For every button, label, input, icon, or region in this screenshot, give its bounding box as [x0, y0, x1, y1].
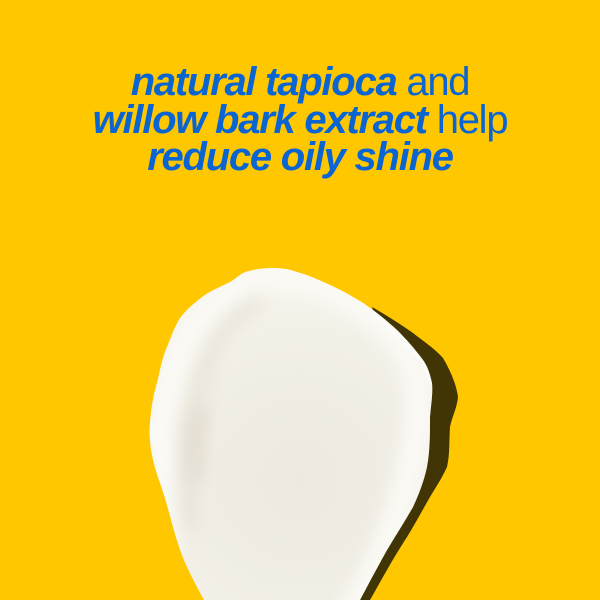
headline [93, 60, 507, 179]
product cream swatch illustration [150, 268, 458, 600]
left dent shading [192, 420, 204, 468]
headline: reduce oily shine [147, 135, 453, 179]
inner shaded crease [187, 298, 258, 510]
cream swatch [150, 268, 432, 600]
headline: natural tapioca and [131, 60, 469, 104]
bright raised rim [160, 277, 418, 600]
headline: willow bark extract help [93, 98, 507, 142]
right edge highlight [415, 354, 431, 384]
cast shadow of cream [340, 307, 458, 600]
